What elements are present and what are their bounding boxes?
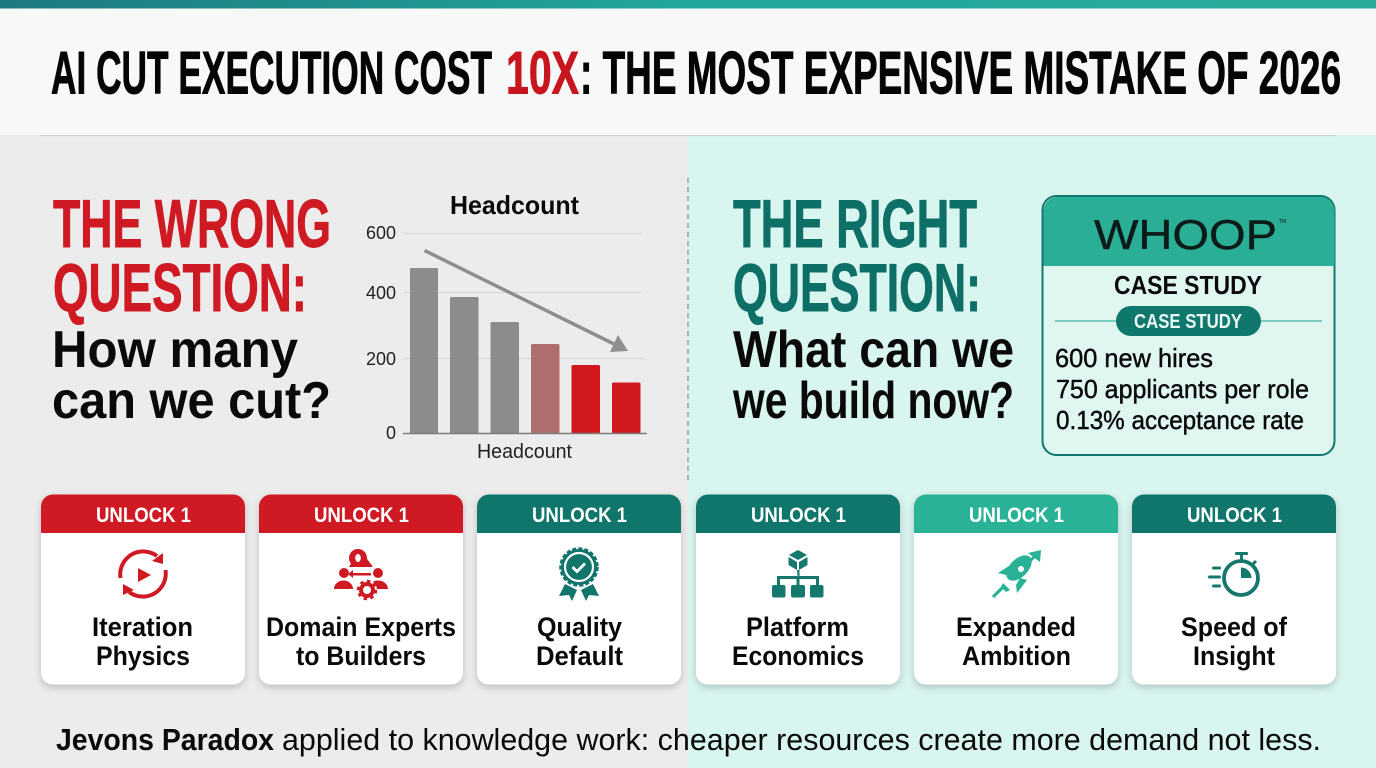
card: speed of insight: UNLOCK 1 bbox=[1187, 504, 1282, 527]
icon: cycle with play bbox=[120, 551, 166, 597]
title: 10X bbox=[506, 40, 579, 106]
icon: quality badge bbox=[559, 549, 599, 601]
heading: the right question: QUESTION: bbox=[733, 250, 981, 326]
card: expanded ambition: Expanded bbox=[956, 612, 1076, 642]
heading: the wrong question: can we cut? bbox=[52, 372, 331, 430]
card: domain experts to builders: UNLOCK 1 bbox=[314, 504, 409, 527]
panel: WHOOP case study card bbox=[1042, 196, 1334, 455]
card: platform economics bbox=[696, 494, 900, 684]
card: domain experts to builders: Domain Experts bbox=[266, 612, 456, 642]
case study heading: CASE STUDY bbox=[1114, 270, 1262, 300]
heading: the right question: What can we bbox=[733, 321, 1014, 379]
card: iteration physics bbox=[41, 494, 245, 684]
heading: the wrong question: How many bbox=[52, 321, 298, 379]
heading: the wrong question: THE WRONG bbox=[53, 186, 331, 262]
WHOOP logo: WHOOP bbox=[1094, 211, 1277, 258]
card: platform economics: Economics bbox=[732, 641, 864, 671]
case study pill bbox=[1116, 306, 1261, 336]
bar chart: headcount bbox=[366, 190, 647, 463]
card: expanded ambition: Ambition bbox=[962, 641, 1071, 671]
heading: the wrong question: QUESTION: bbox=[53, 250, 307, 326]
card: iteration physics: Physics bbox=[96, 641, 190, 671]
y axis labels bbox=[366, 223, 396, 443]
x axis label: Headcount bbox=[477, 441, 572, 463]
y axis labels: 200 bbox=[366, 349, 396, 369]
panel: left grey background bbox=[0, 135, 688, 768]
title: AI CUT EXECUTION COST bbox=[51, 40, 492, 106]
icon: stopwatch bbox=[1208, 552, 1258, 595]
card: iteration physics: UNLOCK 1 bbox=[96, 504, 191, 527]
chart title: Headcount bbox=[450, 190, 579, 220]
y axis labels: 600 bbox=[366, 223, 396, 243]
panel: right mint background bbox=[688, 135, 1376, 768]
y axis labels: 400 bbox=[366, 283, 396, 303]
card: quality default bbox=[477, 494, 681, 684]
bars bbox=[410, 268, 640, 434]
case study stats bbox=[1055, 343, 1309, 435]
heading: the right question bbox=[732, 186, 1014, 430]
card: expanded ambition: UNLOCK 1 bbox=[969, 504, 1064, 527]
card: speed of insight: Insight bbox=[1193, 641, 1275, 671]
trend arrow bbox=[424, 250, 628, 352]
heading: the wrong question bbox=[52, 186, 331, 430]
card: quality default: Quality bbox=[537, 612, 622, 642]
header band bbox=[0, 8, 1376, 135]
y axis labels: 0 bbox=[386, 423, 396, 443]
top accent bar bbox=[0, 0, 1376, 8]
card: speed of insight: Speed of bbox=[1181, 612, 1288, 642]
case study stats: 0.13% acceptance rate bbox=[1056, 405, 1304, 435]
footer statement: Jevons Paradox bbox=[56, 722, 275, 757]
card: quality default: Default bbox=[536, 641, 623, 671]
icon: rocket bbox=[993, 550, 1041, 597]
card: quality default: UNLOCK 1 bbox=[532, 504, 627, 527]
card: domain experts to builders: to Builders bbox=[296, 641, 426, 671]
case study pill: CASE STUDY bbox=[1134, 311, 1243, 333]
card: speed of insight bbox=[1132, 494, 1336, 684]
card: expanded ambition bbox=[914, 494, 1118, 684]
card: platform economics: UNLOCK 1 bbox=[751, 504, 846, 527]
heading: the right question: we build now? bbox=[732, 372, 1014, 430]
icon: people, speech bubble and gear bbox=[334, 549, 388, 600]
heading: the right question: THE RIGHT bbox=[733, 186, 977, 262]
case study stats: 600 new hires bbox=[1055, 343, 1213, 373]
icon: platform hierarchy bbox=[772, 550, 824, 598]
panel: WHOOP case study card: TM bbox=[1279, 219, 1286, 225]
card: domain experts to builders bbox=[259, 494, 463, 684]
case study stats: 750 applicants per role bbox=[1056, 374, 1309, 404]
title bbox=[51, 40, 1341, 106]
card: iteration physics: Iteration bbox=[92, 612, 193, 642]
footer statement: applied to knowledge work: cheaper resources create more demand not less. bbox=[282, 722, 1321, 757]
card: platform economics: Platform bbox=[746, 612, 849, 642]
